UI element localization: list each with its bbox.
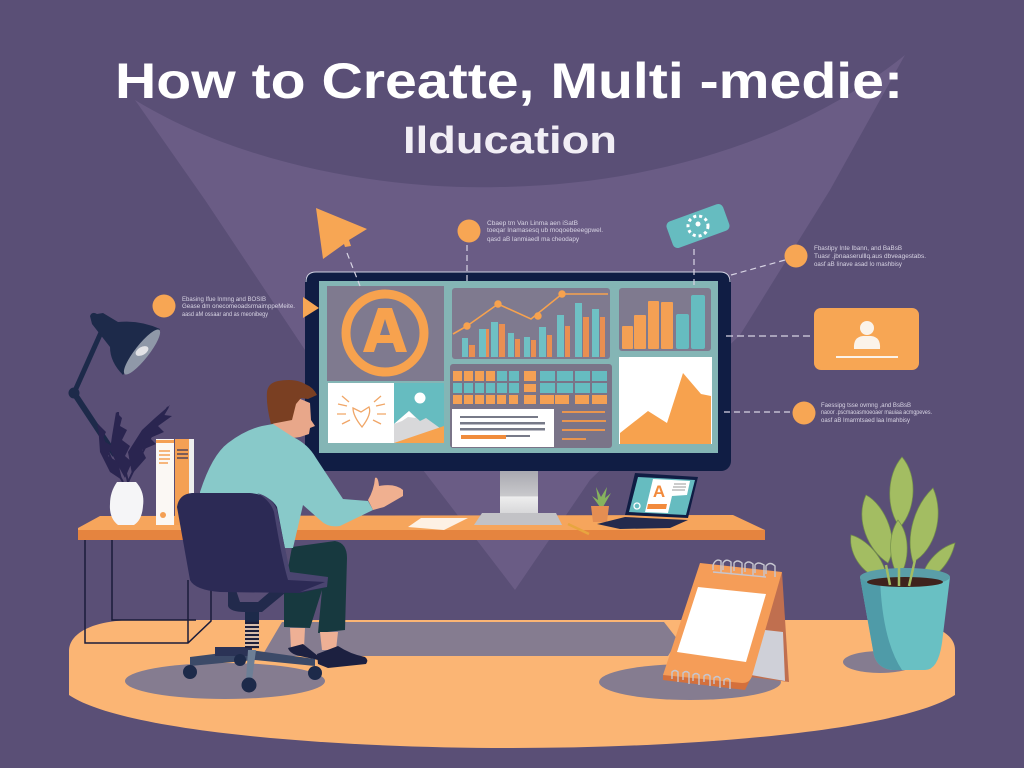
area chart panel bbox=[619, 357, 712, 444]
monitor stand bbox=[474, 471, 562, 525]
vase bbox=[110, 482, 143, 525]
annotation: left note bbox=[152, 294, 295, 318]
annotation: right lower note: naoor .pscmaoasmoeoaer mauiaa acmgpeves. bbox=[821, 409, 932, 416]
annotation: right lower note: oasf aB Imarmtsaed laa Imahbisy bbox=[821, 417, 911, 424]
chair back and seat bbox=[177, 493, 328, 593]
annotation: right upper note: Fbastipy Inte Ibann, and BaBsB bbox=[814, 245, 902, 252]
chair shadow bbox=[125, 663, 325, 699]
text lines bbox=[562, 411, 606, 440]
spotlight beam bbox=[135, 55, 905, 590]
pot shadow bbox=[843, 651, 917, 673]
shirt bbox=[200, 424, 373, 548]
annotation: top note: Cbaep tm Van Linma aen iSatB bbox=[487, 220, 578, 227]
pot bbox=[860, 571, 950, 670]
neck and face bbox=[273, 398, 315, 438]
table panel bbox=[450, 364, 612, 448]
pants bbox=[284, 541, 347, 633]
annotation: right lower note: Faessipg tsse ovmng ,and BsBsB bbox=[821, 402, 911, 409]
screen bbox=[319, 281, 718, 453]
calendar rings bbox=[672, 560, 775, 689]
chair base bbox=[183, 647, 322, 692]
floor platform bbox=[69, 620, 955, 748]
hair bbox=[267, 380, 317, 424]
annotation: top note: qasd aB Ianmiaedl ma cheodapy bbox=[487, 236, 580, 243]
subtitle: Ilducation bbox=[403, 120, 617, 162]
ankles bbox=[290, 628, 338, 650]
desk bbox=[78, 515, 765, 540]
desk legs bbox=[85, 537, 211, 643]
annotation: right upper note: Tuasr .jbnaaserulllq.aus dbveagestabs. bbox=[814, 253, 926, 260]
annotation: teal badge bbox=[665, 203, 731, 288]
annotation: profile card bbox=[726, 308, 919, 370]
title: How to Creatte, Multi -medie: bbox=[115, 53, 903, 109]
line and bar chart panel bbox=[452, 288, 610, 359]
rug bbox=[262, 622, 678, 656]
chair arm bbox=[228, 590, 285, 612]
annotation pointer: triangle bbox=[316, 208, 367, 286]
leaves bbox=[851, 457, 955, 582]
person bbox=[200, 380, 403, 668]
image panel: landscape bbox=[394, 383, 444, 443]
text card bbox=[452, 409, 554, 447]
monitor bbox=[305, 272, 731, 471]
annotation pointer: small triangle bbox=[303, 297, 319, 318]
laptop: A bbox=[653, 482, 665, 501]
desk sheet of paper bbox=[408, 518, 468, 530]
laptop bbox=[597, 473, 698, 529]
annotation: top note: toeqar Inamasesq ub moqoebeeegpwel. bbox=[487, 227, 603, 234]
books bbox=[156, 439, 194, 525]
hand bbox=[368, 478, 403, 510]
bar chart panel bbox=[619, 288, 711, 351]
chair spring bbox=[245, 608, 259, 647]
annotation: right lower note bbox=[724, 402, 932, 424]
annotation: left note: aasd aM ossaar and as meonibegy bbox=[182, 311, 269, 318]
chair bbox=[177, 493, 328, 692]
annotation: left note: Ebasing Ifue Inmng and BOSIB bbox=[182, 296, 266, 303]
calendar shadow bbox=[599, 664, 781, 700]
calendar bbox=[663, 560, 789, 690]
desk pencil bbox=[568, 524, 589, 534]
logo panel bbox=[327, 286, 444, 381]
annotation: left note: Gease dm onecomeoadsrmaimppeMeite. bbox=[182, 303, 295, 310]
annotation: right upper note: oasf aB Iinave asad Io mashbisy bbox=[814, 261, 903, 268]
dark leaves plant bbox=[98, 405, 172, 482]
small desk plant bbox=[591, 487, 611, 522]
title bbox=[115, 53, 903, 162]
image panel: heart bbox=[328, 383, 394, 443]
annotation: top note bbox=[458, 220, 603, 285]
annotation: right upper note bbox=[731, 244, 926, 275]
lamp bbox=[68, 313, 165, 455]
shoes bbox=[288, 644, 318, 660]
large potted plant bbox=[851, 457, 955, 670]
